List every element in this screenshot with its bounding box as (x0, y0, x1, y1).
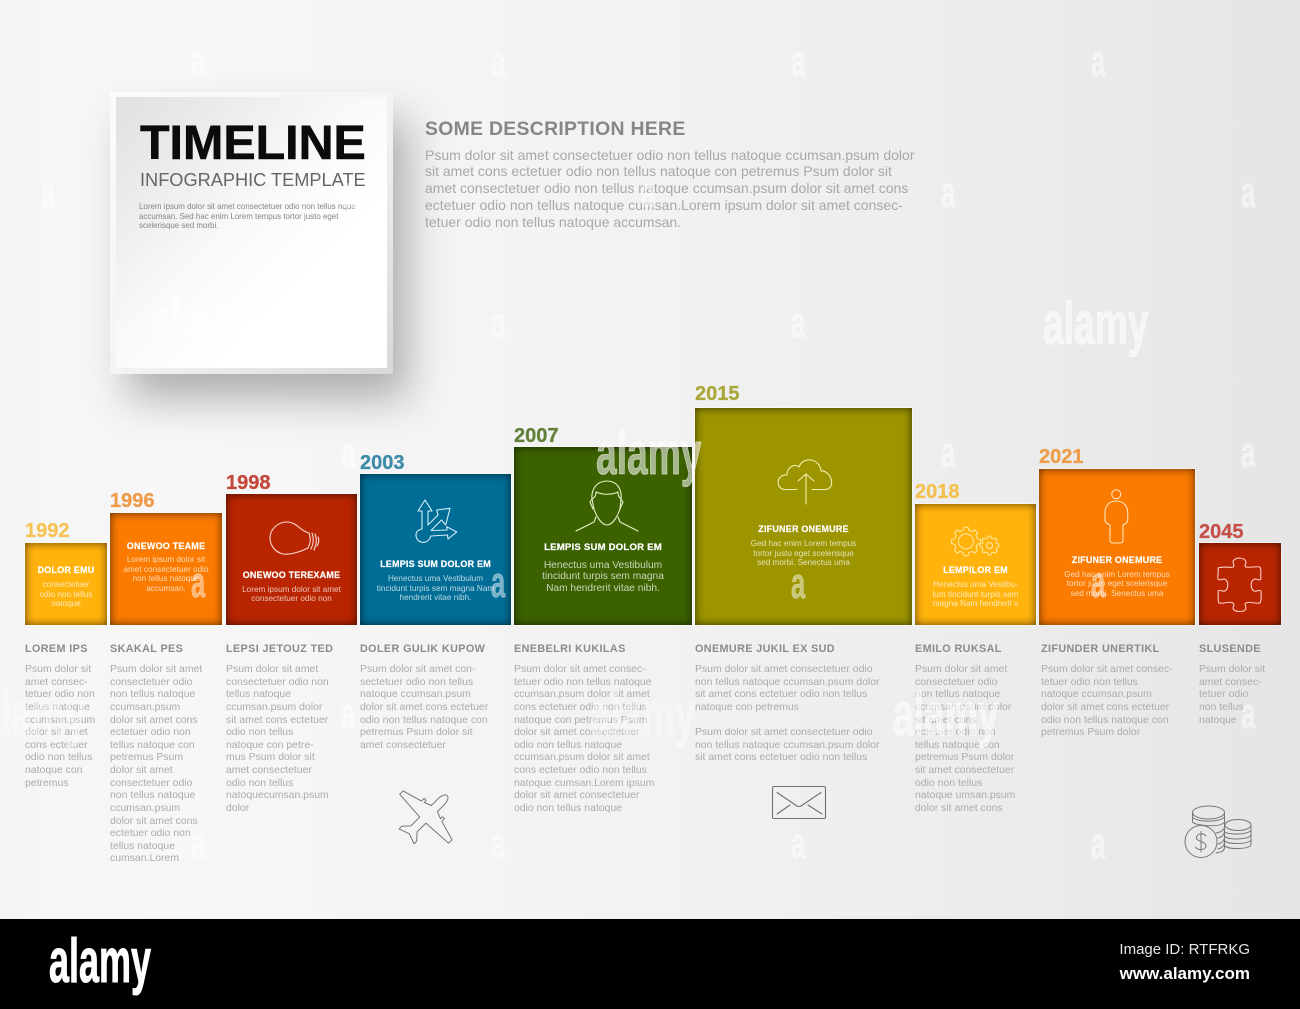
text block: description: ectetuer odio non tellus natoque cumsan.Lorem ipsum dolor sit amet consec- (425, 197, 903, 213)
column text 5: natoque cumsan.Lorem ipsum (514, 778, 654, 789)
year 1992: 1992 (25, 520, 70, 542)
column heading 7: EMILO RUKSAL (915, 643, 1002, 655)
icon: puzzle piece (1217, 558, 1262, 612)
column text 2: tellus natoque con (110, 740, 195, 751)
panel text (1064, 570, 1170, 598)
watermark overlay: a (791, 819, 805, 868)
column text 7: non tellus natoque (915, 689, 1000, 700)
panel text: Henectus uma Vestibulum (388, 574, 483, 583)
column text 7: sit amet cons (915, 714, 976, 726)
text block: description (425, 146, 914, 230)
column text 4: petremus Psum dolor sit (360, 727, 473, 738)
panel text: Ged hac enim Lorem tempus (751, 539, 856, 548)
column text 4: Psum dolor sit amet con- (360, 664, 475, 675)
panel: 1992 (25, 543, 107, 625)
column text 9: Psum dolor sit (1199, 664, 1265, 675)
column text 4: odio non tellus natoque con (360, 714, 488, 726)
column text 7: consectetuer odio (915, 677, 997, 688)
column text 3: dolor (226, 803, 249, 814)
heading: description: SOME DESCRIPTION HERE (425, 118, 686, 140)
watermark overlay: a (341, 689, 355, 738)
column text 3: amet consectetuer (226, 765, 312, 776)
column text 1: dolor sit amet (25, 727, 88, 738)
column text 2 (110, 664, 202, 864)
column text 1: tetuer odio non (25, 689, 95, 700)
column text 7: ccumsan.psum dolor (915, 702, 1011, 713)
column text 8: natoque ccumsan.psum (1041, 689, 1152, 700)
column text 2: consectetuer odio (110, 677, 192, 688)
column text 3: tellus natoque (226, 689, 291, 700)
column text 1 (25, 664, 95, 789)
watermark overlay: a (791, 298, 805, 347)
text block: description: amet consectetuer odio non tellus natoque ccumsan.psum dolor sit amet cons (425, 180, 908, 196)
column text 5: dolor sit amet consectetuer (514, 727, 639, 738)
panel text: magna Nam hendrerit v (933, 599, 1018, 608)
watermark overlay: a (491, 298, 505, 347)
column text 8: dolor sit amet cons ectetuer (1041, 702, 1169, 713)
panel: 1996 (110, 513, 222, 625)
column text 7: dolor sit amet cons (915, 803, 1003, 814)
column text 5: odio non tellus natoque (514, 740, 622, 751)
panel text: sed morbi. Senectus uma (757, 558, 850, 567)
column text 1: odio non tellus (25, 752, 92, 763)
watermark overlay: a (1241, 428, 1255, 477)
watermark overlay: a (341, 428, 355, 477)
icon: branching arrows (415, 499, 458, 543)
card face (116, 97, 387, 368)
year 2018: 2018 (915, 481, 960, 503)
panel text (376, 574, 494, 602)
column text 5: ccumsan.psum dolor sit amet (514, 752, 650, 763)
watermark overlay: alamy (590, 681, 695, 748)
panel: 2045 (1199, 543, 1281, 625)
column text 2: dolor sit amet (110, 765, 173, 776)
column text 2: consectetuer odio (110, 778, 192, 789)
column text 5: natoque con petremus Psum (514, 714, 647, 726)
year 2003: 2003 (360, 452, 404, 474)
column text 8: Psum dolor sit amet consec- (1041, 664, 1173, 675)
panel text: Lorem ipsum dolor sit (127, 555, 205, 564)
image id: Image ID: RTFRKG (1119, 941, 1250, 958)
watermark overlay: a (341, 168, 355, 217)
watermark overlay: a (791, 559, 805, 608)
column text 2: non tellus natoque (110, 790, 195, 801)
panel text: Lorem ipsum dolor sit amet (242, 585, 341, 594)
column text 2: ectetuer odio non (110, 828, 191, 839)
card text (139, 202, 356, 230)
column text 6: sit amet cons ectetuer odio non tellus (695, 689, 867, 700)
watermark overlay: a (191, 558, 205, 607)
panel: 2021 (1039, 469, 1195, 625)
column text 6: Psum dolor sit amet consectetuer odio (695, 664, 873, 675)
column text 3: odio non tellus (226, 727, 293, 738)
panel heading: ZIFUNER ONEMURE (1072, 554, 1162, 564)
column text 6 (695, 664, 880, 763)
column text 1: cons ectetuer (25, 740, 88, 751)
column text 5: Psum dolor sit amet consec- (514, 664, 646, 675)
icon: light bulb (269, 522, 320, 555)
icon: gears (951, 526, 1000, 556)
panel text (542, 560, 664, 594)
panel text: Nam hendrerit vitae nibh. (546, 583, 660, 594)
panel text: lum tincidunt turpis sem (932, 590, 1018, 599)
panel text: amet consectetuer odio (123, 564, 209, 574)
column text 7: odio non tellus (915, 778, 982, 789)
panel heading: ONEWOO TEREXAME (243, 570, 340, 580)
watermark overlay: a (191, 819, 205, 868)
column text 7: petremus Psum dolor (915, 752, 1014, 763)
panel text: non tellus natoque (133, 574, 199, 583)
column text 3: odio non tellus (226, 778, 293, 789)
column heading 8: ZIFUNDER UNERTIKL (1041, 643, 1160, 655)
column heading 5: ENEBELRI KUKILAS (514, 643, 626, 655)
panel text: tincidunt turpis sem magna Nam (377, 584, 494, 593)
column text 4: sectetuer odio non tellus (360, 677, 473, 688)
column text 1: petremus (25, 778, 69, 789)
column text 7 (915, 664, 1015, 814)
column text 4: dolor sit amet cons ectetuer (360, 702, 488, 713)
heading: TIMELINE: TIMELINE (140, 116, 366, 170)
column text 2: dolor sit amet cons (110, 714, 198, 726)
column text 3: Psum dolor sit amet (226, 664, 318, 675)
watermark overlay: a (1241, 689, 1255, 738)
column text 9: non tellus (1199, 702, 1244, 713)
column text 8: tetuer odio non tellus (1041, 677, 1138, 688)
year 2007: 2007 (514, 425, 558, 447)
watermark overlay: a (191, 298, 205, 347)
watermark overlay: alamy (1043, 290, 1148, 357)
watermark overlay: a (941, 428, 955, 477)
watermark overlay: a (1091, 819, 1105, 868)
panel heading: DOLOR EMU (38, 565, 94, 575)
icon: cloud upload (778, 459, 832, 504)
column text 5: cons ectetuer odio non tellus (514, 765, 647, 776)
column text 6: non tellus natoque ccumsan.psum dolor (695, 740, 880, 751)
panel text (40, 580, 92, 608)
watermark overlay: a (491, 558, 505, 607)
panel text: tincidunt turpis sem magna (542, 571, 664, 582)
column text 7: tellus natoque con (915, 740, 1000, 751)
column text 8 (1041, 664, 1173, 738)
icon: airplane (398, 790, 452, 844)
column text 1: natoque con (25, 765, 82, 776)
column text 5: cons ectetuer odio non tellus (514, 702, 647, 713)
watermark overlay: a (1091, 37, 1105, 86)
column text 1: tellus natoque (25, 702, 90, 713)
panel text: tortor justo eget scelerisque (753, 549, 854, 558)
text block: description: sit amet cons ectetuer odio non tellus natoque con petremus Psum dolor sit (425, 163, 892, 179)
watermark overlay: a (941, 168, 955, 217)
column text 1: amet consec- (25, 677, 88, 688)
website: www.alamy.com (1120, 964, 1250, 983)
column text 3: ccumsan.psum dolor (226, 702, 322, 713)
column text 2: non tellus natoque (110, 689, 195, 700)
column text 5: ccumsan.psum dolor sit amet (514, 689, 650, 700)
panel heading: LEMPILOR EM (943, 565, 1008, 575)
column text 3: consectetuer odio non (226, 677, 329, 688)
column heading 1: LOREM IPS (25, 643, 88, 655)
column text 2: tellus natoque (110, 841, 175, 852)
column text 8: petremus Psum dolor (1041, 727, 1140, 738)
column text 2: ccumsan.psum (110, 803, 180, 814)
column text 2: ectetuer odio non (110, 727, 191, 738)
card text: accumsan. Sed hac enim Lorem tempus tortor justo eget (139, 212, 338, 221)
column text 2: Psum dolor sit amet (110, 664, 202, 675)
column text 3: natoque con petre- (226, 740, 314, 751)
column text 8: odio non tellus natoque con (1041, 714, 1169, 726)
column text 3: sit amet cons ectetuer (226, 714, 328, 726)
column text 7: ectetuer odio non (915, 727, 996, 738)
card text: scelerisque sed morbi. (139, 221, 218, 230)
year 2015: 2015 (695, 383, 740, 405)
column text 3: natoquecumsan.psum (226, 790, 329, 801)
column text 1: ccumsan.psum (25, 714, 95, 726)
panel text: Ged hac enim Lorem tempus (1064, 570, 1170, 579)
year 1998: 1998 (226, 472, 270, 494)
column text 6: non tellus natoque ccumsan.psum dolor (695, 677, 880, 688)
column text 2: dolor sit amet cons (110, 816, 198, 826)
column text 9: amet consec- (1199, 677, 1262, 688)
year 2021: 2021 (1039, 446, 1084, 468)
panel text: sed morbi. Senectus uma (1071, 589, 1163, 598)
column text 7: Psum dolor sit amet (915, 664, 1007, 675)
panel text: tortor justo eget scelerisque (1067, 579, 1167, 588)
panel text: Henectus uma Vestibu- (933, 580, 1018, 589)
column heading 3: LEPSI JETOUZ TED (226, 643, 333, 655)
watermark overlay: a (791, 37, 805, 86)
text block: description: tetuer odio non tellus natoque accumsan. (425, 214, 681, 230)
column text 2: ccumsan.psum (110, 702, 180, 713)
panel: 2018 (915, 504, 1036, 625)
panel: title card (110, 92, 393, 374)
panel text: natoque (51, 599, 81, 608)
column heading 2: SKAKAL PES (110, 643, 183, 655)
column heading 4: DOLER GULIK KUPOW (360, 643, 485, 655)
text block: description: Psum dolor sit amet consectetuer odio non tellus natoque ccumsan.psum dolor (425, 146, 914, 162)
column text 6: natoque con petremus (695, 702, 799, 713)
column text 4: natoque ccumsan.psum (360, 689, 471, 700)
watermark overlay: a (191, 37, 205, 86)
icon: coins (1184, 806, 1252, 858)
panel: 2007 (514, 447, 692, 625)
panel heading: ZIFUNER ONEMURE (758, 524, 849, 534)
card text: Lorem ipsum dolor sit amet consectetuer odio non tellus nque (139, 202, 356, 211)
column text 5: dolor sit amet consectetuer (514, 790, 639, 801)
column text 2: cumsan.Lorem (110, 853, 179, 864)
year 1996: 1996 (110, 490, 154, 512)
column heading 6: ONEMURE JUKIL EX SUD (695, 643, 835, 655)
column text 9: tetuer odio (1199, 689, 1248, 700)
watermark overlay: a (41, 168, 55, 217)
column text 9: natoque (1199, 714, 1237, 726)
panel text: odio non tellus (40, 590, 92, 598)
panel text: Henectus uma Vestibulum (544, 560, 662, 571)
panel heading: ONEWOO TEAME (127, 541, 205, 551)
column text 6: sit amet cons ectetuer odio non tellus (695, 752, 867, 763)
column text 5: tetuer odio non tellus natoque (514, 677, 652, 688)
column text 3 (226, 664, 329, 814)
column text 3: mus Psum dolor sit (226, 752, 315, 763)
column text 4: amet consectetuer (360, 740, 446, 751)
footer bar (0, 919, 1300, 1009)
column text 4 (360, 664, 488, 751)
panel text (242, 585, 341, 603)
column text 9 (1199, 664, 1265, 726)
watermark overlay: a (491, 819, 505, 868)
watermark overlay: a (1241, 168, 1255, 217)
footer logo: alamy (49, 927, 151, 996)
panel text: hendrerit vitae nibh. (400, 593, 471, 602)
panel text (751, 539, 856, 567)
panel: 2015 (695, 408, 912, 625)
panel: 1998 (226, 494, 357, 625)
panel text (932, 580, 1018, 608)
column text 6: Psum dolor sit amet consectetuer odio (695, 727, 873, 738)
watermark overlay: a (641, 168, 655, 217)
panel heading: LEMPIS SUM DOLOR EM (544, 542, 662, 553)
watermark overlay: alamy (893, 681, 998, 748)
column heading 9: SLUSENDE (1199, 643, 1261, 655)
panel text: consectetuer (43, 580, 89, 589)
column text 1: Psum dolor sit (25, 664, 91, 675)
column text 7: natoque umsan.psum (915, 790, 1015, 801)
subheading: infographic template: INFOGRAPHIC TEMPLATE (140, 170, 366, 190)
panel text: consectetuer odio non (251, 594, 332, 603)
watermark overlay: alamy (150, 285, 255, 352)
icon: person (1104, 489, 1128, 544)
icon: envelope (772, 786, 826, 819)
column text 7: sit amet consectetuer (915, 765, 1014, 776)
column text 5 (514, 664, 654, 814)
watermark overlay: a (1091, 558, 1105, 607)
panel text (123, 555, 209, 592)
panel: 2003 (360, 474, 511, 625)
column text 5: odio non tellus natoque (514, 803, 622, 814)
icon: person head (576, 480, 638, 532)
column text 2: petremus Psum (110, 752, 183, 763)
panel text: accumsan. (146, 584, 186, 592)
panel heading: LEMPIS SUM DOLOR EM (380, 559, 491, 569)
watermark overlay: alamy (596, 420, 701, 487)
year 2045: 2045 (1199, 521, 1244, 543)
watermark overlay: a (491, 37, 505, 86)
